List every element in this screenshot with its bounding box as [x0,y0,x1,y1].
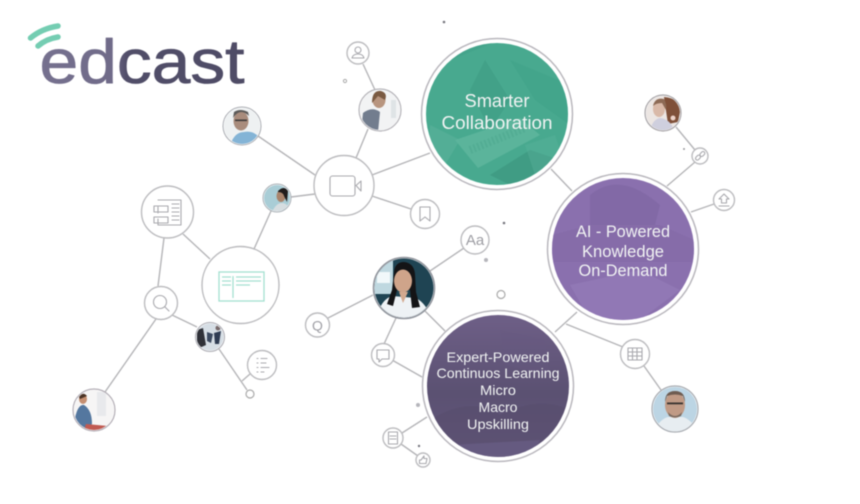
photo: man with glasses [223,107,261,146]
edcast logo [30,26,244,97]
icon: search node [144,286,178,320]
icon: Q search letter node [306,313,330,337]
panel: AI-Powered Knowledge On-Demand [548,174,698,324]
panel: Expert-Powered Continuos Learning: Macro [478,399,518,415]
decorative dots [246,21,685,447]
photo: bald man with glasses [652,386,698,432]
icon: list node [248,350,276,380]
heading: Expert-Powered Continuos Learning Micro Macro Upskilling: Expert-Powered [446,349,550,365]
panel: Expert-Powered Continuos Learning: Upskilling [467,416,529,432]
panel: Expert-Powered Continuos Learning: Continuos Learning [436,365,560,381]
panel: Smarter Collaboration: Collaboration [442,113,552,133]
panel: Expert-Powered Continuos Learning [422,310,574,462]
panel: Smarter Collaboration [422,38,572,190]
icon: document outline node [142,186,194,238]
icon: Aa typography node [461,226,489,254]
icon: thumbs up node [416,453,430,467]
icon: Aa typography node: Aa [466,232,485,249]
photo: man at laptop [73,389,115,431]
heading: Smarter Collaboration: Smarter [464,91,530,111]
photo: young woman [645,95,681,131]
icon: Q search letter node: Q [312,318,323,334]
heading: AI-Powered Knowledge On-Demand: AI - Powered [576,222,670,241]
photo texture: person at desk [586,308,642,319]
photo: woman in grey shirt [359,89,401,132]
photo texture: audience [446,433,550,457]
logo signal arcs [30,26,58,46]
panel: AI-Powered Knowledge On-Demand: Knowledge [582,242,664,261]
photo: smiling woman [374,258,434,320]
icon: upload arrow node [714,190,734,210]
panel: AI-Powered Knowledge On-Demand: On-Demand [578,261,668,280]
photo texture: laptop on desk [430,100,568,184]
photo: small woman portrait [263,184,291,212]
logo wordmark: edcast [40,28,244,97]
photo: team meeting [196,322,224,352]
panel: Expert-Powered Continuos Learning: Micro [480,382,516,398]
icon: person node [347,42,369,64]
icon: video camera node [314,156,374,216]
icon: book layout node [202,246,279,324]
icon: chat bubble node [372,344,394,366]
connector lines [105,64,714,456]
icon: calendar node [620,340,650,368]
icon: link node [692,148,708,164]
icon: bookmark node [410,200,440,228]
icon: notes node [383,428,403,448]
